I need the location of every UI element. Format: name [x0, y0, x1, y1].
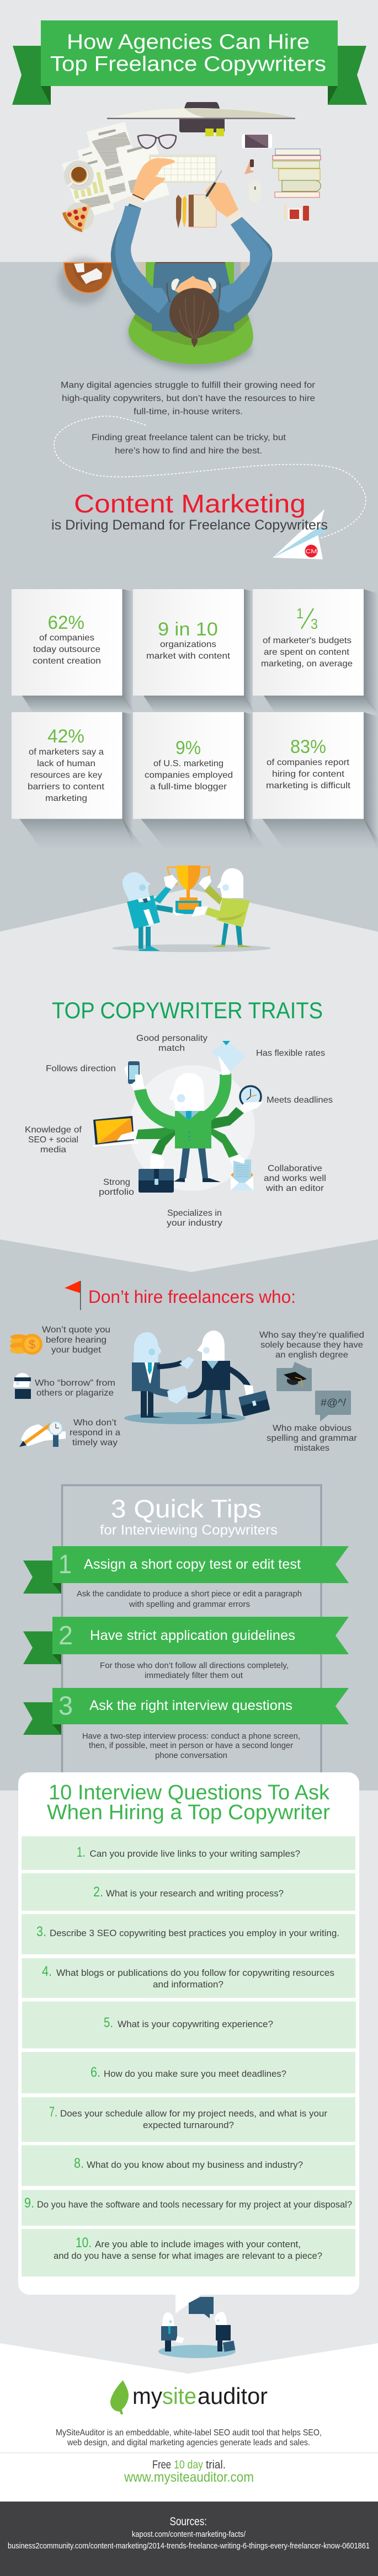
pen: [205, 170, 222, 199]
chart: copywriter traits figure: [25, 1034, 333, 1228]
trait labels: your industry: [167, 1218, 222, 1228]
text: spelling mistakes: mistakes: [294, 1444, 329, 1453]
text: spelling mistakes: Who make obvious: [273, 1424, 352, 1433]
heading: interview questions: [47, 1781, 330, 1824]
heading: don't hire freelancers: [65, 1281, 296, 1310]
right sleeve light: [219, 216, 272, 313]
stat card: 42%: lack of human: [37, 759, 95, 768]
speech bubble: [189, 2297, 214, 2318]
tip 2 text: immediately filter them out: [145, 1671, 243, 1680]
intro text: Finding great freelance talent can be tricky, but: [92, 433, 286, 442]
tip 2 text: [100, 1661, 289, 1680]
tip 3 text: Have a two-step interview process: conduct a phone screen,: [82, 1732, 300, 1741]
text: spelling mistakes: spelling and grammar: [267, 1434, 358, 1443]
question 6: [22, 2052, 355, 2093]
stat card: 42%: barriers to content: [28, 782, 105, 792]
question 6: How do you make sure you meet deadlines?: [104, 2069, 286, 2079]
company description: web design, and digital marketing agencies generate leads and sales.: [67, 2438, 310, 2447]
icon: wastepaper bin: [58, 258, 113, 304]
company description: MySiteAuditor is an embeddable, white-label SEO audit tool that helps SEO,: [56, 2428, 322, 2438]
icon: pens and notebook: [176, 195, 216, 228]
icon: glasses: [138, 135, 176, 148]
question 5: [22, 2001, 356, 2049]
icon: phone: [242, 134, 272, 148]
question 9: [22, 2190, 355, 2226]
intro text: high-quality copywriters, but don’t have the resources to hire: [62, 394, 315, 403]
trait labels: media: [40, 1145, 66, 1155]
tip 1 text: Ask the candidate to produce a short piece or edit a paragraph: [77, 1590, 302, 1599]
heading: interview questions: 10 Interview Questions To Ask: [49, 1781, 330, 1804]
icon: briefcase: [238, 1391, 270, 1417]
intro text: [61, 381, 316, 456]
text: timely: timely way: [72, 1438, 118, 1447]
icon: phone: [124, 1061, 145, 1091]
question 8: 8.: [74, 2156, 84, 2171]
stat card: one third: of marketer's budgets: [263, 636, 352, 645]
icon: keyboard: [149, 154, 217, 183]
tip 1 text: [77, 1590, 302, 1609]
stat card: 9 in 10: market with content: [146, 651, 231, 661]
title: Top Freelance Copywriters: [50, 53, 326, 76]
text: timely: respond in a: [70, 1428, 120, 1437]
left hand: [132, 158, 175, 200]
stat card: 9%: companies employed: [145, 771, 233, 780]
question 7: expected turnaround?: [143, 2120, 234, 2130]
icon: envelope: [229, 1155, 253, 1190]
icon: coins: [10, 1334, 42, 1355]
question 10: and do you have a sense for what images are relevant to a piece?: [54, 2251, 322, 2261]
headphones: [167, 283, 220, 302]
stat card: 83%: [253, 712, 364, 819]
heading: content marketing: [51, 489, 328, 533]
text: borrow: others or plagarize: [36, 1388, 114, 1398]
company description: [56, 2428, 322, 2447]
papers: [62, 122, 169, 215]
panel: 3 quick tips: [23, 1485, 349, 1816]
question 7: 7.: [49, 2104, 57, 2120]
icon: stack of books: [273, 149, 321, 197]
illustration: writer at desk: [58, 102, 321, 370]
icon: paper plane: [273, 509, 329, 559]
icon: contract: [211, 1041, 246, 1075]
icon: briefcase: [139, 1155, 174, 1193]
text: won't quote: before hearing: [46, 1335, 107, 1345]
question 10: [22, 2229, 355, 2276]
tip 1 ribbon: 1: [58, 1550, 72, 1579]
left figure: [132, 1332, 194, 1418]
icon: coffee cup: [64, 161, 94, 190]
text: borrow: Who “borrow” from: [35, 1378, 115, 1388]
question 4: and information?: [153, 1980, 223, 1990]
heading: quick tips: 3 Quick Tips: [111, 1494, 262, 1523]
call to action: www.mysiteauditor.com: [124, 2470, 254, 2485]
question 8: What do you know about my business and industry?: [87, 2160, 303, 2170]
tip 2 text: For those who don’t follow all directions completely,: [100, 1661, 289, 1670]
sleeves dark: [111, 202, 272, 333]
tip 2 ribbon: 2: [58, 1621, 73, 1650]
right hand: [205, 182, 238, 217]
icon: red flag: [65, 1281, 81, 1310]
text: english degree: [259, 1330, 364, 1360]
trait labels: [25, 1034, 333, 1228]
stat card: one third: 1: [296, 605, 304, 622]
intro text: Many digital agencies struggle to fulfill their growing need for: [61, 381, 316, 390]
trait labels: Has flexible rates: [256, 1049, 325, 1058]
icon: speech bubble: [315, 1391, 351, 1421]
call to action: Free: [152, 2459, 171, 2471]
right figure: [191, 868, 252, 947]
left small figure: [161, 2312, 184, 2351]
intro text: full-time, in-house writers.: [134, 407, 243, 416]
stat card: 42%: [12, 712, 123, 819]
text: won't quote: your budget: [51, 1345, 102, 1355]
question 3: [22, 1914, 355, 1954]
call to action: [124, 2459, 254, 2485]
stat card: one third: [253, 589, 364, 696]
trait labels: Collaborative: [268, 1164, 322, 1173]
multi-armed figure: [134, 1073, 244, 1182]
logo: mysiteauditor: auditor: [198, 2383, 268, 2409]
trait labels: Good personality: [136, 1034, 207, 1043]
stat card: 83%: of companies report: [267, 758, 350, 767]
text: borrow: [35, 1378, 115, 1398]
red flags list: [10, 1325, 364, 1453]
icon: pen and clock: [19, 1421, 66, 1447]
trait labels: Knowledge of: [25, 1125, 82, 1135]
text: timely: [70, 1418, 120, 1447]
trait labels: with an editor: [265, 1184, 324, 1193]
question 4: 4.: [42, 1964, 52, 1979]
illustration: handshake: [124, 1330, 270, 1424]
trait labels: portfolio: [99, 1188, 134, 1197]
question 8: [22, 2145, 355, 2186]
question 3: 3.: [36, 1924, 46, 1939]
stat card: 62%: [12, 589, 123, 696]
tip 3 text: phone conversation: [155, 1751, 227, 1760]
footer: sources: [0, 2502, 378, 2576]
icon: graduation cap: [276, 1362, 312, 1391]
illustration: two figures holding a trophy: [112, 865, 271, 952]
stat card: 9%: [133, 712, 244, 819]
question 7: [22, 2097, 355, 2142]
character: writer: [111, 158, 272, 348]
stat card: 9%: 9%: [175, 737, 201, 758]
stat card: 9 in 10: [133, 589, 244, 696]
stat card: 42%: resources are key: [30, 771, 102, 780]
icon: mouse: [249, 180, 261, 202]
tip 2 ribbon: [23, 1617, 349, 1664]
cuffs: [127, 194, 144, 208]
left figure: [123, 872, 185, 951]
text: english degree: Who say they’re qualified: [259, 1330, 364, 1340]
hair: [169, 288, 219, 339]
question 10: 10.: [76, 2235, 92, 2251]
stat card: 83%: marketing is difficult: [266, 781, 351, 790]
question 10: Are you able to include images with your content,: [95, 2240, 301, 2249]
heading: content marketing: Content Marketing: [74, 489, 306, 518]
tip 1 ribbon: Assign a short copy test or edit test: [84, 1557, 301, 1572]
logo: mysiteauditor: my: [132, 2383, 162, 2409]
tip 3 ribbon: [23, 1688, 349, 1735]
question 9: 9.: [24, 2195, 34, 2211]
stat card: 62%: of companies: [39, 633, 94, 643]
question 4: What blogs or publications do you follow for copywriting resources: [56, 1968, 334, 1978]
text: spelling mistakes: [267, 1424, 358, 1453]
question 3: Describe 3 SEO copywriting best practices you employ in your writing.: [50, 1928, 339, 1938]
question 6: 6.: [90, 2065, 100, 2080]
title banner: [12, 20, 367, 105]
left sleeve light: [115, 206, 169, 313]
tip 1 ribbon: [23, 1546, 349, 1594]
tip 3 text: then, if possible, meet in person or have a second longer: [89, 1741, 293, 1750]
heading: top copywriter traits: TOP COPYWRITER TRAITS: [52, 997, 323, 1023]
question 5: 5.: [104, 2015, 113, 2030]
panel: statistics cards: [12, 589, 378, 849]
question 9: Do you have the software and tools necessary for my project at your disposal?: [37, 2200, 352, 2210]
question 2: What is your research and writing process?: [106, 1889, 284, 1899]
heading: don't hire freelancers: Don’t hire freelancers who:: [88, 1287, 296, 1307]
face: [175, 276, 214, 294]
stat card: 62%: content creation: [33, 656, 101, 666]
stat card: 42%: of marketers say a: [29, 747, 104, 757]
question 7: Does your schedule allow for my project needs, and what is your: [60, 2109, 328, 2119]
icon: paper plane: CM: [306, 548, 317, 555]
trait labels: Meets deadlines: [267, 1095, 333, 1105]
icon: pizza: [62, 202, 94, 232]
stat card: 62%: today outsource: [33, 645, 100, 654]
stat card: 9 in 10: organizations: [160, 640, 216, 649]
text: won't quote: Won’t quote you: [42, 1325, 110, 1335]
monitor: [107, 102, 295, 136]
stat card: 62%: 62%: [47, 612, 84, 633]
footer: sources: kapost.com/content-marketing-facts/: [132, 2530, 246, 2539]
right figure: [167, 1330, 254, 1419]
call to action: trial.: [206, 2459, 226, 2471]
icon: speech bubble: #@^/: [321, 1397, 346, 1408]
wrist watch: [132, 194, 144, 200]
stat card: 42%: marketing: [45, 794, 87, 803]
tip 3 ribbon: Ask the right interview questions: [89, 1698, 292, 1713]
stat card: 42%: 42%: [47, 726, 84, 747]
stat card: 83%: 83%: [290, 736, 326, 757]
tip 2 ribbon: Have strict application guidelines: [90, 1628, 295, 1643]
heading: content marketing: is Driving Demand for Freelance Copywriters: [51, 517, 328, 533]
title: How Agencies Can Hire: [67, 31, 310, 54]
illustration: two small figures talking: [158, 2297, 236, 2358]
heading: interview questions: When Hiring a Top Copywriter: [47, 1801, 330, 1824]
stat card: 83%: hiring for content: [272, 769, 345, 779]
tip 3 text: [82, 1732, 300, 1760]
right small figure: [214, 2312, 235, 2352]
text: timely: Who don’t: [73, 1418, 117, 1428]
question 1: [22, 1836, 355, 1870]
logo: mysiteauditor: [110, 2380, 268, 2414]
icon: stopwatch: [240, 1086, 263, 1113]
trait labels: Follows direction: [46, 1064, 116, 1073]
question 5: What is your copywriting experience?: [118, 2019, 273, 2029]
text: english degree: solely because they have: [260, 1340, 363, 1350]
stat card: 9 in 10: 9 in 10: [158, 619, 218, 640]
stat card: 9%: of U.S. marketing: [153, 759, 223, 768]
panel: 10 interview questions: [18, 1772, 359, 2313]
torso: [152, 263, 235, 331]
question 1: Can you provide live links to your writing samples?: [89, 1849, 300, 1859]
intro text: here’s how to find and hire the best.: [115, 446, 262, 456]
stat card: one third: 3: [311, 616, 318, 632]
text: won't quote: [42, 1325, 110, 1355]
question 2: [22, 1873, 355, 1911]
question 4: [22, 1958, 355, 1998]
trait labels: and works well: [264, 1174, 326, 1183]
dashed flight path: [54, 416, 366, 538]
icon: stationery: [284, 204, 309, 221]
trait labels: match: [158, 1044, 185, 1053]
question 1: 1.: [77, 1845, 86, 1860]
icon: laptop: [92, 1116, 138, 1147]
trait labels: SEO + social: [28, 1135, 78, 1145]
title: [50, 31, 326, 76]
question 2: 2.: [93, 1884, 103, 1900]
stat card: one third: marketing, on average: [261, 659, 353, 669]
heading: quick tips: [100, 1494, 278, 1538]
chair and seat: [128, 262, 253, 370]
trait labels: Strong: [103, 1178, 130, 1187]
stat card: one third: are spent on content: [264, 648, 350, 657]
trophy: [167, 865, 210, 914]
card shadows: [19, 589, 378, 849]
call to action: 10 day: [174, 2459, 203, 2471]
icon: leaf: [110, 2380, 129, 2414]
logo: mysiteauditor: site: [162, 2383, 196, 2409]
footer: sources: Sources:: [170, 2515, 207, 2528]
icon: masked thief: [13, 1373, 31, 1399]
trait labels: Specializes in: [167, 1209, 222, 1218]
heading: quick tips: for Interviewing Copywriters: [100, 1522, 278, 1538]
text: english degree: an english degree: [275, 1350, 348, 1360]
icon: coins: $: [29, 1338, 35, 1351]
tip 3 ribbon: 3: [58, 1691, 73, 1721]
tip 1 text: with spelling and grammar errors: [129, 1600, 250, 1609]
stat card: 9%: a full-time blogger: [150, 782, 227, 792]
icon: usb stick: [244, 159, 254, 174]
